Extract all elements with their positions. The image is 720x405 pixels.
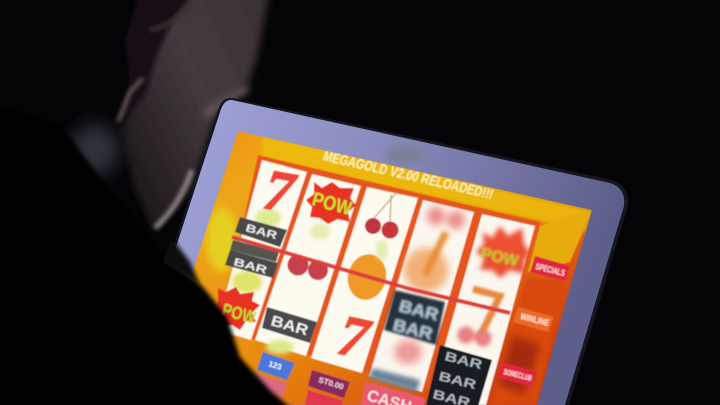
person's dark shoulder (0, 100, 310, 405)
seven: 7 (254, 158, 304, 224)
reel divider line (232, 237, 510, 313)
screen background (170, 131, 592, 405)
bar stack (425, 345, 492, 405)
reel face (255, 174, 361, 356)
bottom button: pink (252, 374, 287, 398)
reel face (369, 200, 474, 392)
blurred pow burst (476, 226, 530, 278)
side button: specials: SPECIALS (535, 261, 566, 278)
collar (71, 124, 119, 176)
blurred cherries (427, 207, 465, 229)
blurred cherries (394, 340, 422, 364)
side button: winline (513, 307, 554, 332)
cherries (365, 192, 398, 238)
bar: BAR (232, 256, 268, 277)
reel 3 (311, 187, 418, 373)
ear (118, 0, 195, 125)
reel 2 (255, 174, 361, 356)
side button: club: SOMECLUB (503, 367, 533, 383)
bar: BAR (269, 313, 310, 339)
bar (235, 217, 287, 247)
reel 5 (425, 214, 535, 405)
bezel (165, 100, 624, 405)
bar: BAR (244, 222, 278, 242)
photo: person playing a slot game on a laptop (69, 0, 628, 405)
blurred pow burst: POW (479, 245, 521, 271)
blurred cherries (458, 326, 492, 346)
game title: MEGAGOLD V2.00 RELOADED!!! (321, 148, 496, 202)
bezel reflection (385, 145, 425, 165)
cherries (288, 254, 328, 280)
side button: club (497, 362, 537, 387)
neck and face (122, 0, 272, 232)
green glow (255, 209, 281, 227)
outer edge (160, 98, 628, 405)
blurred seven (473, 289, 500, 340)
reel face (444, 213, 536, 405)
bar (225, 250, 278, 278)
slot game screen (170, 131, 592, 405)
bottom button: blue: 123 (267, 359, 283, 372)
head and neck (71, 0, 272, 232)
reel 1 (214, 158, 307, 340)
side button: winline: WINLINE (520, 311, 550, 328)
jaw rim light (155, 170, 192, 228)
ear top rim (150, 2, 192, 30)
blurred orange (404, 248, 448, 292)
yellow left glow (206, 208, 238, 272)
blurred bars: BAR (397, 296, 440, 325)
ear rim light (118, 78, 143, 122)
pow burst (306, 182, 356, 224)
bar stack: BAR (437, 368, 479, 392)
yellow top band (262, 136, 592, 232)
blurred bars: BAR (391, 315, 434, 344)
bottom button: blue (257, 352, 295, 380)
dim bar (230, 240, 279, 262)
bar (262, 307, 317, 343)
bezel shade at shoulder edge (162, 238, 200, 285)
green glow (376, 240, 388, 260)
reel face (216, 160, 307, 340)
bottom button: purple: ST0.00 (317, 375, 345, 392)
green glow (310, 223, 330, 239)
blurred seven (425, 232, 446, 275)
side button: specials (530, 256, 570, 281)
pow burst (214, 287, 260, 330)
blurred bar (369, 368, 420, 392)
orange (347, 254, 387, 300)
pow burst: POW (220, 300, 258, 328)
bottom button: cash (360, 382, 425, 405)
reel 4 (369, 200, 474, 392)
laptop lid (160, 98, 628, 405)
reels frame (239, 154, 540, 390)
bottom button: purple (308, 370, 350, 398)
bar stack: BAR (443, 348, 485, 372)
blurred bars (384, 290, 445, 345)
lower right panel (490, 278, 566, 405)
cheek rim light (205, 88, 248, 115)
seven: 7 (327, 303, 380, 370)
bottom button: red (304, 390, 343, 405)
pow burst: POW (310, 189, 354, 220)
yellow corner panel (528, 210, 592, 272)
reel face (311, 187, 418, 373)
